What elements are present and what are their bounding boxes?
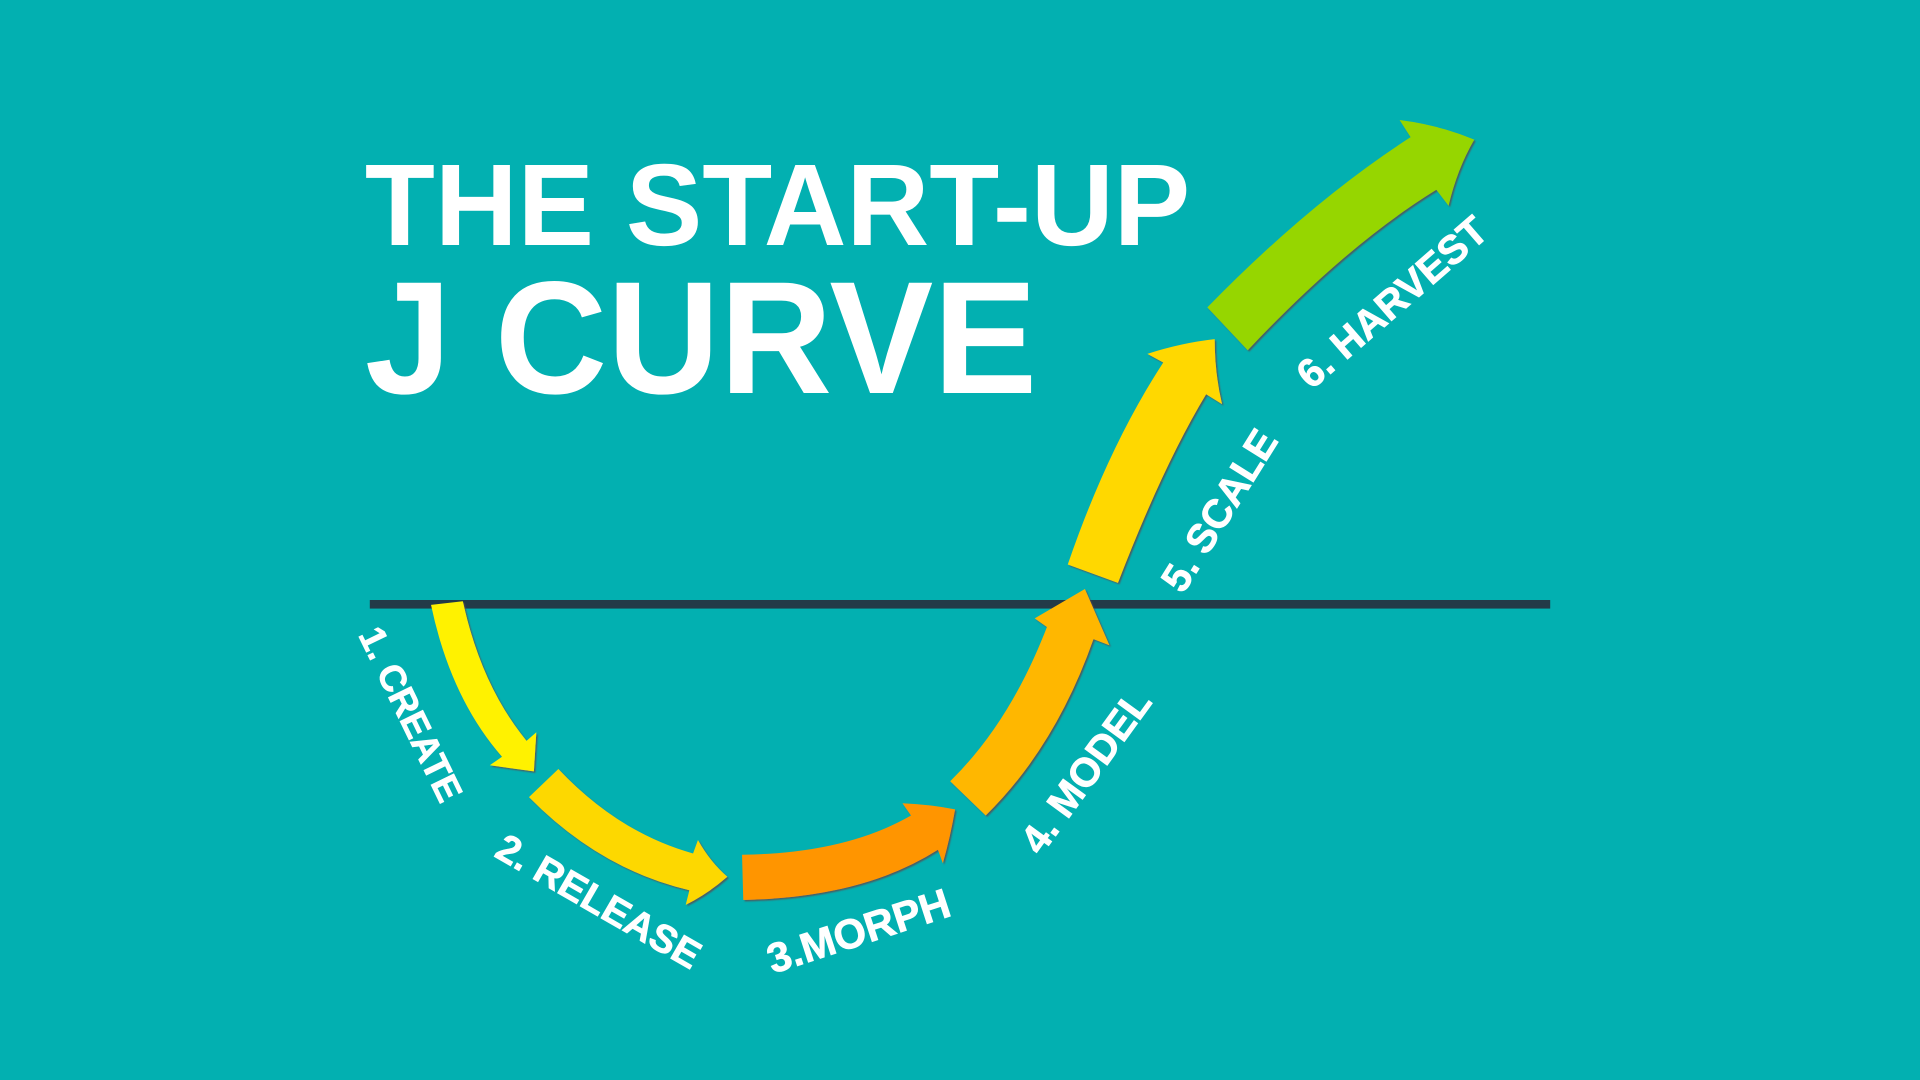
arrow: model bbox=[950, 589, 1109, 816]
arrow: harvest bbox=[1207, 120, 1474, 350]
label: release: 2. RELEASE bbox=[489, 825, 709, 977]
labels bbox=[350, 207, 1496, 983]
arrow: morph bbox=[742, 803, 955, 900]
arrow: create bbox=[431, 601, 536, 771]
label: scale: 5. SCALE bbox=[1152, 421, 1286, 599]
label: model: 4. MODEL bbox=[1011, 681, 1160, 862]
arrow: scale bbox=[1068, 339, 1222, 583]
title bbox=[365, 141, 1190, 427]
title: J CURVE bbox=[365, 247, 1037, 427]
baseline axis bbox=[370, 600, 1550, 609]
label: create: 1. CREATE bbox=[350, 621, 469, 809]
title: THE START-UP bbox=[365, 141, 1190, 271]
arrow: release bbox=[529, 769, 727, 905]
label: morph: 3.MORPH bbox=[761, 880, 956, 983]
label: harvest: 6. HARVEST bbox=[1287, 207, 1496, 397]
